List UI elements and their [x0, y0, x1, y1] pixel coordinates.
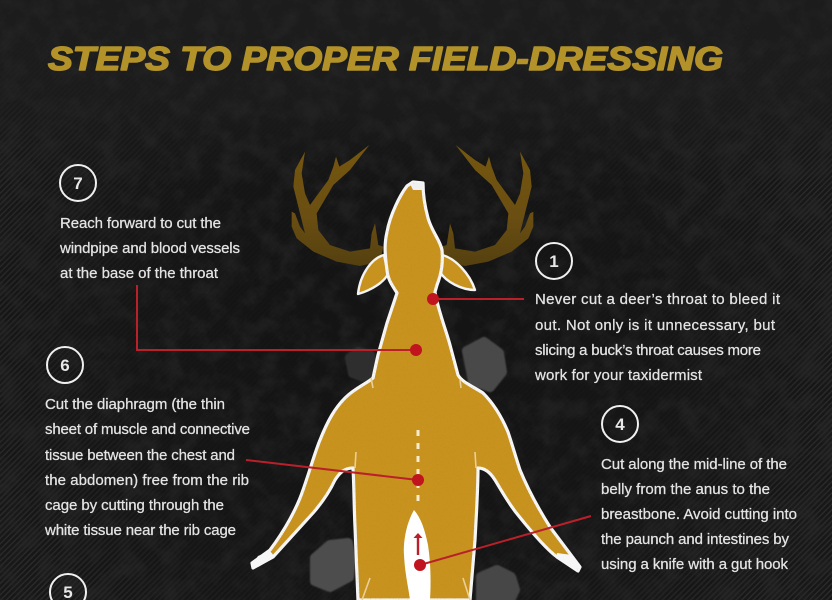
step 6: cage by cutting through the — [45, 497, 224, 514]
step 6: 6 — [60, 356, 70, 375]
step 7: at the base of the throat — [60, 265, 219, 282]
step 1 — [534, 243, 781, 384]
incision — [404, 510, 431, 600]
step 6: the abdomen) free from the rib — [45, 472, 249, 489]
step 4: using a knife with a gut hook — [601, 556, 788, 573]
step 1: Never cut a deer’s throat to bleed it — [535, 291, 781, 308]
step 7: windpipe and blood vessels — [59, 240, 240, 257]
step 1: 1 — [549, 252, 559, 271]
step 7: 7 — [73, 174, 83, 193]
step 4: breastbone. Avoid cutting into — [601, 506, 797, 523]
leader: step 7 — [137, 285, 422, 356]
step 6: Cut the diaphragm (the thin — [45, 396, 225, 413]
leader: step 4 — [414, 516, 591, 571]
body — [240, 170, 590, 600]
leader: step 1 — [427, 293, 524, 305]
step 7 — [59, 165, 240, 282]
left antler — [292, 145, 383, 266]
step 1: slicing a buck’s throat causes more — [535, 342, 761, 359]
step 4: Cut along the mid-line of the — [601, 456, 787, 473]
step 4: 4 — [615, 415, 625, 434]
title: STEPS TO PROPER FIELD-DRESSING — [48, 40, 723, 77]
step 4: the paunch and intestines by — [601, 531, 790, 548]
step 1: out. Not only is it unnecessary, but — [535, 317, 776, 334]
step 6: sheet of muscle and connective — [45, 421, 250, 438]
step 6 — [44, 347, 250, 539]
step 7: Reach forward to cut the — [60, 215, 221, 232]
step 6: tissue between the chest and — [45, 447, 235, 464]
step 5 — [50, 574, 86, 600]
step 4 — [601, 406, 797, 573]
leader: step 6 — [246, 460, 424, 486]
step 1: work for your taxidermist — [534, 367, 703, 384]
ears — [358, 255, 475, 294]
right antler — [442, 145, 533, 266]
step 6: white tissue near the rib cage — [44, 522, 236, 539]
dashed cut line — [416, 430, 420, 503]
incision arrow — [414, 533, 422, 555]
deer carcass — [240, 170, 590, 600]
step 4: belly from the anus to the — [601, 481, 770, 498]
rocks behind deer — [315, 342, 515, 600]
